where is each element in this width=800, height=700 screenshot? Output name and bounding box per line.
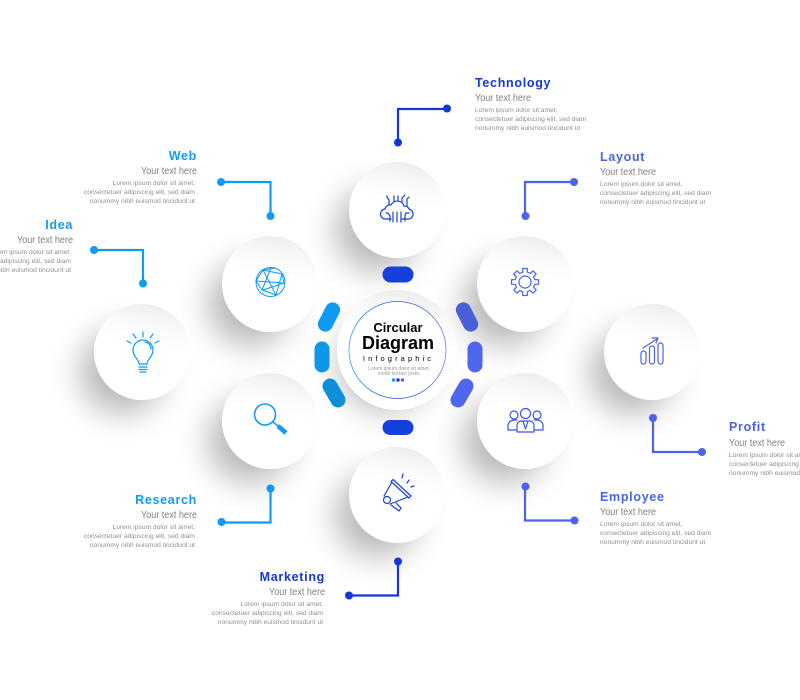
text: Marketing: nonummy nibh euismod tincidunt ut <box>218 619 323 626</box>
text: Research: Your text here <box>141 510 197 521</box>
text: Research: consectetuer adipiscing elit, sed diam <box>84 533 195 540</box>
panel: Layout <box>477 150 712 332</box>
text: Profit <box>729 420 800 477</box>
icon: gear <box>512 268 538 296</box>
icon: magnifier <box>254 404 286 433</box>
text: Idea: Your text here <box>17 235 73 246</box>
connector <box>522 482 578 524</box>
text: Marketing: Your text here <box>269 587 325 598</box>
text: Marketing: Marketing <box>260 570 325 584</box>
title: Circular Diagram <box>362 320 434 363</box>
connector <box>218 484 274 526</box>
text: Research: Lorem ipsum dolor sit amet, <box>112 524 195 531</box>
text: Research: Research <box>135 493 197 507</box>
center description <box>368 366 430 377</box>
text: Web: consectetuer adipiscing elit, sed diam <box>84 189 195 196</box>
text: Web: Your text here <box>141 166 197 177</box>
text: Technology: Lorem ipsum dolor sit amet, <box>475 107 558 114</box>
panel: Idea <box>0 218 190 400</box>
icon: team <box>508 408 543 432</box>
text: Web: Lorem ipsum dolor sit amet, <box>112 180 195 187</box>
three dots <box>392 378 404 382</box>
connector <box>394 104 451 146</box>
connector <box>345 558 402 600</box>
text: Marketing: consectetuer adipiscing elit, sed diam <box>212 610 323 617</box>
panel: Marketing <box>212 447 445 626</box>
icon: growth chart <box>641 338 663 364</box>
text: Technology: nonummy nibh euismod tincidunt ut <box>475 125 580 132</box>
text: Layout <box>600 150 712 206</box>
text: Layout: consectetuer adipiscing elit, sed diam <box>600 190 712 197</box>
panel: Web <box>84 149 318 332</box>
text: Marketing <box>212 570 325 626</box>
panel: Research <box>84 373 318 549</box>
text: Research <box>84 493 197 549</box>
text: Web <box>84 149 197 205</box>
text: Layout: Your text here <box>600 167 656 178</box>
icon: cloud circuit <box>380 195 413 222</box>
text: Profit: Your text here <box>729 438 785 449</box>
connector <box>217 178 274 220</box>
segmented ring of pills <box>314 266 482 435</box>
panel: Profit <box>604 304 800 477</box>
text: Employee: Lorem ipsum dolor sit amet, <box>600 521 683 528</box>
text: Layout: Lorem ipsum dolor sit amet, <box>600 181 683 188</box>
connector <box>522 178 578 220</box>
center description: Lorem ipsum dolor sit amet, <box>368 366 430 372</box>
icon: megaphone <box>384 474 414 511</box>
connector <box>649 414 706 456</box>
connector <box>90 246 147 288</box>
text: Profit: Profit <box>729 420 766 434</box>
text: Technology: consectetuer adipiscing elit, sed diam <box>475 116 587 123</box>
text: Marketing: Lorem ipsum dolor sit amet, <box>240 601 323 608</box>
center hub <box>337 290 457 410</box>
text: Technology: Technology <box>475 76 551 90</box>
center description: morbi fermen justo. <box>378 371 420 377</box>
icon: network globe <box>256 268 285 296</box>
text: Web: nonummy nibh euismod tincidunt ut <box>90 198 195 205</box>
text: Employee: Employee <box>600 490 665 504</box>
text: Web: Web <box>169 149 197 163</box>
icon: light bulb <box>127 332 159 372</box>
panel: Employee <box>477 373 712 546</box>
text: Technology <box>475 76 587 132</box>
text: Employee <box>600 490 712 546</box>
text: Employee: Your text here <box>600 507 656 518</box>
title: Circular Diagram: Circular <box>373 320 423 335</box>
text: Technology: Your text here <box>475 93 531 104</box>
text: Employee: nonummy nibh euismod tincidunt ut <box>600 539 705 546</box>
text: Employee: consectetuer adipiscing elit, sed diam <box>600 530 712 537</box>
text: Layout: Layout <box>600 150 645 164</box>
panel: Technology <box>349 76 587 258</box>
text: Idea <box>0 218 73 274</box>
text: Layout: nonummy nibh euismod tincidunt ut <box>600 199 705 206</box>
text: Idea: Idea <box>45 218 73 232</box>
title: Circular Diagram: Infographic <box>363 354 434 363</box>
text: Research: nonummy nibh euismod tincidunt ut <box>90 542 195 549</box>
title: Circular Diagram: Diagram <box>362 333 434 353</box>
